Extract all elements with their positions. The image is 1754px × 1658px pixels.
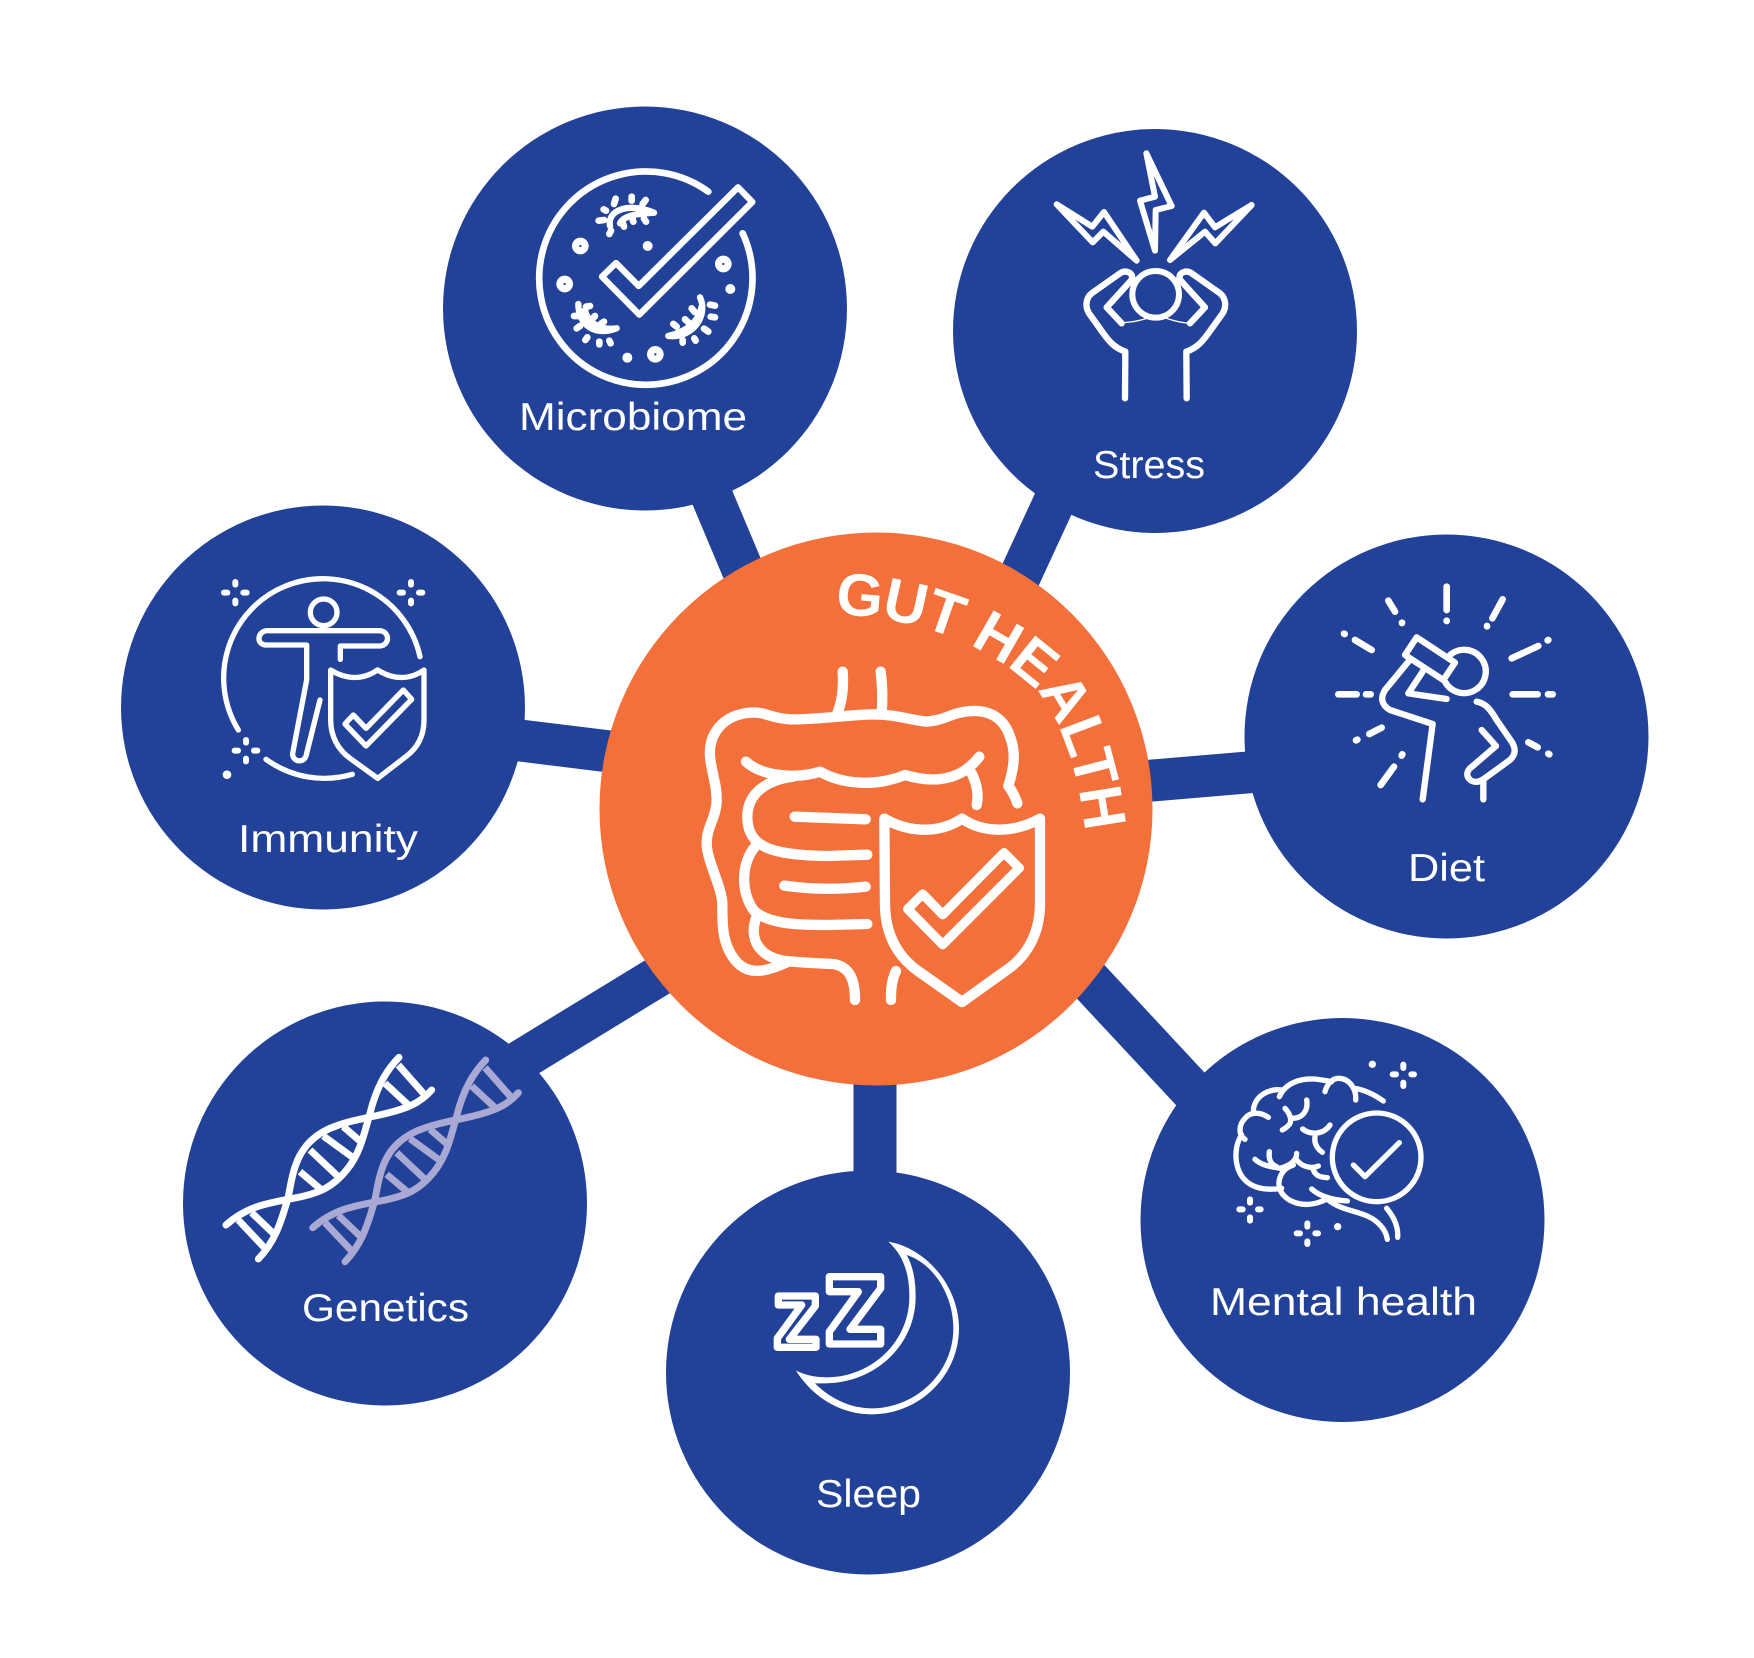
label: Mental health: Mental health [1210,1281,1477,1324]
icon: intestines with shield [707,672,1040,1002]
connector: mental health [1075,965,1210,1110]
label: Stress: Stress [1093,444,1205,487]
icon: stressed person with lightning [1057,153,1252,398]
label: Sleep: Sleep [816,1473,921,1516]
icon: brain with check [1236,1061,1421,1244]
connector: genetics [500,963,680,1073]
label: Microbiome: Microbiome [519,396,747,439]
heading: GUT HEALTH on curve: GUT HEALTH [839,574,1126,828]
panel: mental health [1140,1018,1544,1422]
label: Immunity: Immunity [238,818,419,861]
label: Diet: Diet [1408,847,1485,890]
panel: genetics [183,1002,587,1406]
panel: sleep [666,1170,1070,1574]
connector: microbiome [705,480,755,599]
connector: stress [1008,485,1062,602]
icon: white DNA helix [226,1057,432,1259]
panel: immunity [121,506,525,910]
label: Genetics: Genetics [302,1287,469,1330]
panel: diet [1244,534,1648,938]
connector: immunity [500,738,630,754]
icon: moon and zz [777,1242,959,1414]
icon: body in circle with shield [223,579,424,779]
curve for heading [835,615,1085,833]
icon: lilac DNA helix [313,1060,518,1262]
icon: petri dish with bacteria and check [539,171,753,385]
connector: diet [1135,771,1265,782]
connector: sleep [854,1070,896,1185]
panel: stress [953,129,1357,533]
panel: microbiome [443,106,847,510]
panel: gut health centre [600,532,1152,1086]
icon: person drinking with rays [1338,587,1553,799]
